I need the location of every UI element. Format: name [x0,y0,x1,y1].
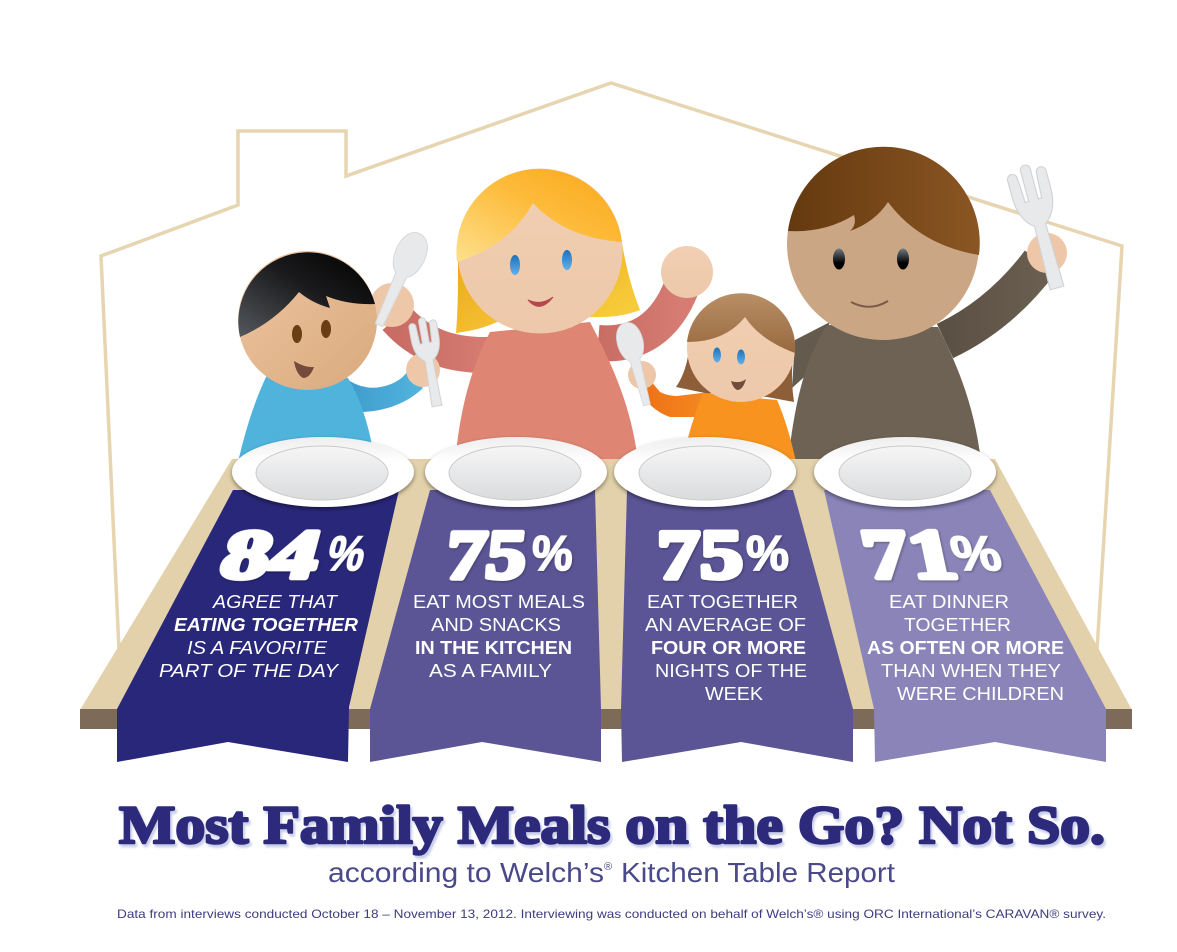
value 75% [657,517,789,594]
subtitle: according to Welch’s [328,857,604,888]
description 4: AS OFTEN OR MORE [867,638,1064,658]
mother smile [528,297,553,306]
father far arm [792,322,830,388]
mother raised hand [661,246,713,298]
subtitle: Kitchen Table Report [621,857,895,888]
description 1: AGREE THAT [212,592,339,612]
father body [788,325,981,462]
girl arm [643,380,710,417]
girl hair back [676,340,794,402]
boy mouth [294,361,314,378]
description 3: EAT TOGETHER [647,592,798,612]
plate 4 [814,437,996,507]
girl body [682,393,796,462]
value 75%: 75 [657,517,743,594]
mother hair back [456,243,640,333]
value 75%: % [746,527,789,581]
father raised arm [945,262,1040,341]
figure: boy [238,251,440,462]
ribbon 1 [117,490,399,762]
description 3: WEEK [705,684,763,704]
boy hair [238,252,375,337]
ribbon 3 [621,490,853,762]
description 2 [413,592,585,681]
father eyes [833,248,909,270]
description 3: AN AVERAGE OF [645,615,806,635]
stat 2 [413,516,585,681]
description 1: EATING TOGETHER [174,615,358,635]
table edge [80,709,1132,729]
value 71% [855,517,1007,594]
description 1 [159,592,358,681]
father hand [1027,233,1067,273]
description 1: PART OF THE DAY [159,661,340,681]
mother body [455,322,638,462]
mother left arm [396,318,490,355]
table top [80,459,1132,710]
value 84%: % [321,526,372,581]
table [80,459,1132,729]
father smile [851,301,888,307]
value 71%: 71 [855,517,963,594]
title: Most Family Meals on the Go? Not So. [119,795,1105,855]
description 4: TOGETHER [904,615,1011,635]
description 2: EAT MOST MEALS [413,592,585,612]
value 71%: % [945,526,1007,581]
subtitle: ® [604,861,612,873]
plate 2 [425,437,607,507]
figure: mother [370,168,713,462]
subtitle [328,857,895,888]
description 4: EAT DINNER [889,592,1009,612]
description 2: IN THE KITCHEN [415,638,572,658]
description 4: WERE CHILDREN [897,684,1064,704]
utensil: boy's spoon [365,228,433,331]
description 3: FOUR OR MORE [651,638,806,658]
description 1: IS A FAVORITE [187,638,328,658]
girl hand [628,361,656,389]
girl eyes [713,348,745,364]
description 4: THAN WHEN THEY [881,661,1061,681]
house outline [101,83,1122,650]
mother hair [456,169,622,262]
value 75%: 75 [442,516,530,594]
father head [787,148,979,340]
utensil: boy's fork [408,315,451,408]
ribbon 2 [370,490,601,762]
boy hand [406,353,440,387]
mother eyes [510,250,572,275]
plate 3 [614,437,796,507]
girl mouth [731,379,746,390]
stat 4 [855,517,1064,704]
value 75% [442,516,574,594]
boy head [238,251,377,390]
value 84% [213,517,372,594]
father hair [788,147,980,255]
boy arm [345,372,423,412]
girl head [687,294,795,402]
description 2: AS A FAMILY [429,661,552,681]
mother left hand [370,283,414,327]
value 75%: % [530,527,574,581]
description 3: NIGHTS OF THE [655,661,807,681]
girl hair [687,293,795,353]
figure: father [787,147,1067,462]
utensil: girl's spoon [613,320,659,408]
boy body [238,375,372,462]
utensil: father's fork [1005,160,1076,293]
stat 1 [159,517,372,681]
ribbon 4 [824,490,1106,762]
footnote: Data from interviews conducted October 18 – November 13, 2012. Interviewing was conducted on behalf of Welch’s® using ORC International’s CARAVAN® survey. [117,907,1106,921]
boy eyes [292,320,331,343]
figure: girl [628,293,796,462]
stat 3 [645,517,807,704]
plate 1 [232,437,414,507]
value 84%: 84 [213,517,329,594]
description 2: AND SNACKS [431,615,561,635]
mother right arm [598,286,682,343]
mother head [458,168,622,334]
description 4 [867,592,1064,704]
description 3 [645,592,807,704]
